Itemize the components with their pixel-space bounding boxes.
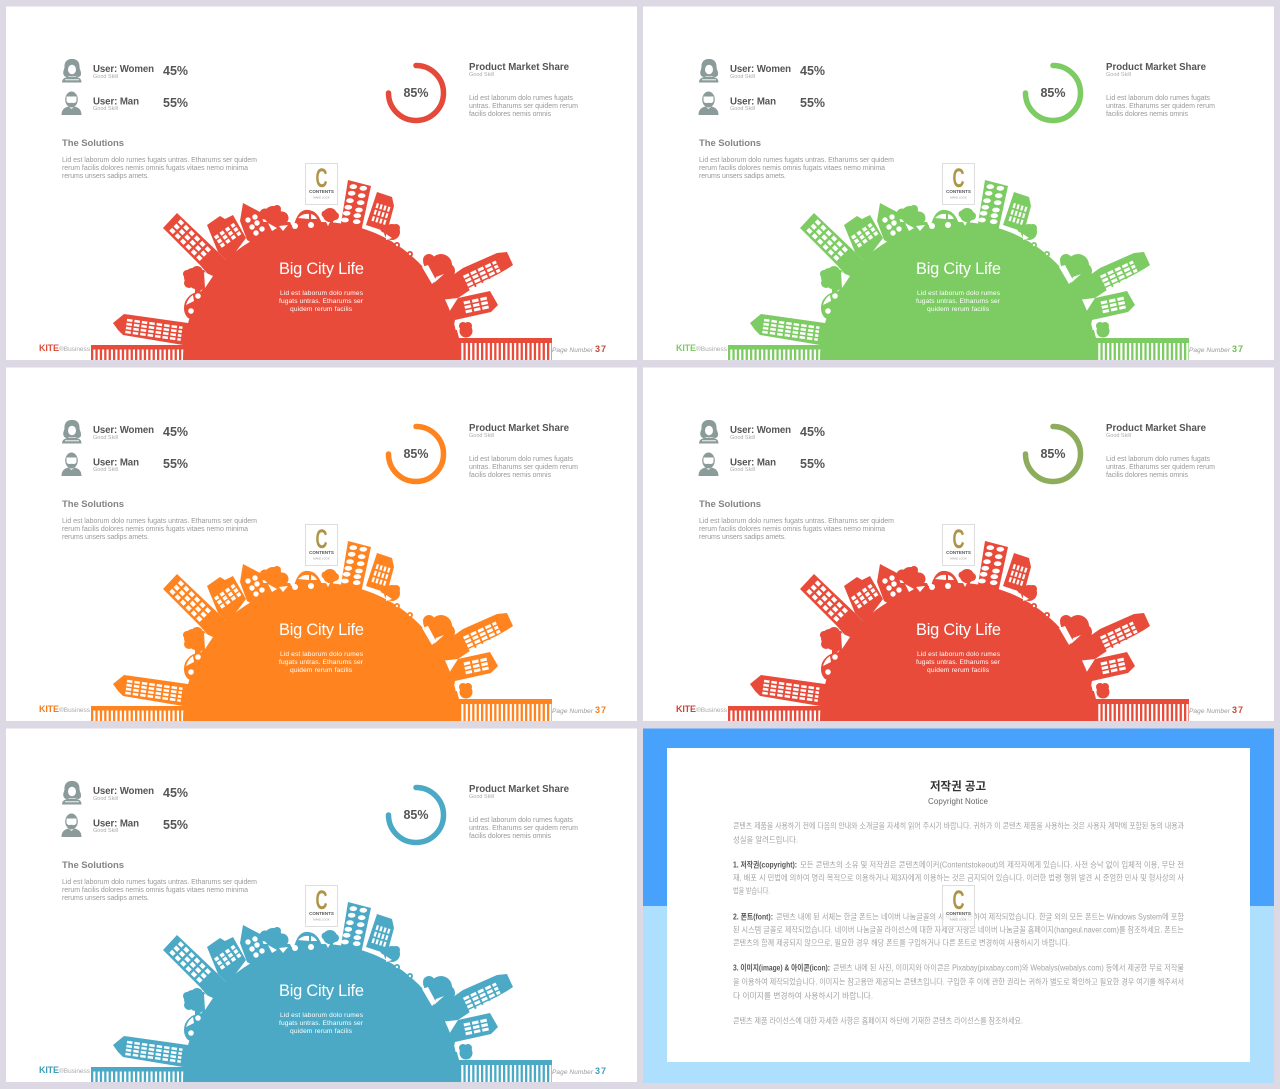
- donut chart 85%: 85%: [1040, 86, 1066, 100]
- the solutions text block: rerum facilis dolores nemis omnis fugats vitaes nemo minima: [62, 526, 248, 533]
- user women label: User: Women: [93, 786, 154, 797]
- the solutions text block: The Solutions: [62, 860, 124, 871]
- logo badge: MAKE LOOK: [950, 918, 967, 922]
- women percentage: 45%: [800, 425, 825, 439]
- logo badge: C: [952, 885, 964, 915]
- logo badge: [942, 163, 974, 204]
- icon: woman user: [62, 59, 82, 82]
- page number: [552, 344, 606, 354]
- women percentage: 45%: [163, 64, 188, 78]
- product market share text block: facilis dolores nemis omnis: [1106, 472, 1188, 479]
- logo badge: CONTENTS: [946, 550, 971, 555]
- page number: Page Number: [1189, 708, 1231, 715]
- donut chart 85%: [388, 66, 444, 120]
- user women label: User: Women: [730, 64, 791, 75]
- page number: Page Number: [552, 1069, 594, 1076]
- big city life heading: fugats untras. Etharums ser: [916, 298, 1001, 305]
- product market share text block: Good Skill: [469, 72, 494, 78]
- the solutions text block: [62, 860, 257, 902]
- user women label: [93, 64, 154, 80]
- product market share text block: [1106, 423, 1215, 479]
- big city life heading: quidem rerum facilis: [290, 667, 353, 674]
- city skyline illustration: [91, 541, 552, 721]
- icon: man user: [698, 452, 718, 476]
- user women label: Good Skill: [730, 435, 755, 441]
- product market share text block: facilis dolores nemis omnis: [469, 111, 552, 118]
- city skyline illustration: [91, 902, 552, 1082]
- page number: Page Number: [1189, 347, 1231, 354]
- man percentage: 55%: [800, 457, 825, 471]
- women percentage: 45%: [800, 64, 825, 78]
- product market share text block: Product Market Share: [1106, 62, 1207, 73]
- logo badge: MAKE LOOK: [950, 196, 967, 200]
- logo badge: C: [952, 524, 964, 554]
- icon: woman user: [699, 420, 718, 444]
- footer brand: ®Business: [696, 345, 728, 353]
- product market share text block: [1106, 62, 1215, 118]
- donut chart 85%: [1026, 426, 1080, 482]
- big city life heading: quidem rerum facilis: [927, 306, 990, 313]
- icon: woman user: [62, 420, 82, 444]
- donut chart 85%: 85%: [1040, 447, 1066, 461]
- logo badge: CONTENTS: [309, 189, 334, 194]
- product market share text block: untras. Etharums ser quidem rerum: [469, 103, 578, 110]
- big city life heading: Lid est laborum dolo rumes: [917, 290, 1001, 297]
- big city life heading: Lid est laborum dolo rumes: [917, 651, 1001, 658]
- user women label: User: Women: [730, 425, 791, 436]
- the solutions text block: [62, 138, 257, 180]
- logo badge: [942, 885, 974, 926]
- section 2 font: 2. 폰트(font):: [733, 912, 773, 922]
- logo badge: [306, 885, 338, 926]
- big city life heading: fugats untras. Etharums ser: [279, 298, 364, 305]
- product market share text block: untras. Etharums ser quidem rerum: [469, 464, 578, 471]
- section 1 copyright: 모든 콘텐츠의 소유 및 저작권은 콘텐츠메이커(Contentstokeout)의 제작자에게 있습니다. 사전 승낙 없이 입체적 이용, 무단 전: [800, 860, 1184, 870]
- footer brand: ®Business: [59, 706, 91, 714]
- section 1 copyright: 1. 저작권(copyright):: [733, 860, 797, 870]
- user women label: [93, 425, 154, 441]
- donut chart 85%: 85%: [403, 808, 429, 822]
- section 3 image and icon: 3. 이미지(image) & 아이콘(icon):: [733, 962, 830, 972]
- the solutions text block: The Solutions: [699, 138, 761, 149]
- big city life heading: Big City Life: [279, 621, 364, 639]
- page number: 37: [595, 1066, 606, 1076]
- panel: red slide: [6, 6, 637, 360]
- footer brand: KITE: [39, 343, 59, 353]
- user women label: Good Skill: [93, 796, 118, 802]
- product market share text block: Good Skill: [469, 794, 494, 800]
- product market share text block: Lid est laborum dolo rumes fugats: [469, 817, 574, 824]
- big city life heading: quidem rerum facilis: [290, 306, 353, 313]
- icon: man user: [62, 452, 82, 476]
- user man label: User: Man: [93, 458, 139, 468]
- big city life heading: Big City Life: [279, 260, 364, 278]
- user women label: [93, 786, 154, 802]
- big city life heading: [916, 621, 1001, 674]
- donut chart 85%: [388, 426, 444, 482]
- product market share text block: untras. Etharums ser quidem rerum: [469, 825, 578, 832]
- the solutions text block: Lid est laborum dolo rumes fugats untras. Etharums ser quidem: [62, 879, 257, 886]
- product market share text block: [469, 784, 578, 840]
- the solutions text block: Lid est laborum dolo rumes fugats untras. Etharums ser quidem: [699, 518, 894, 525]
- the solutions text block: [699, 499, 894, 541]
- user women label: User: Women: [93, 64, 154, 75]
- section 1 copyright: [733, 860, 1185, 896]
- big city life heading: Big City Life: [916, 260, 1001, 278]
- big city life heading: [916, 260, 1001, 313]
- footer brand: ®Business: [696, 706, 728, 714]
- footer brand: [676, 343, 728, 353]
- panel: red and olive slide: [643, 368, 1274, 721]
- the solutions text block: The Solutions: [62, 138, 124, 149]
- footer brand: [39, 704, 91, 714]
- donut chart 85%: 85%: [403, 86, 429, 100]
- footer brand: KITE: [676, 343, 696, 353]
- logo badge: [306, 163, 338, 204]
- big city life heading: [279, 621, 364, 674]
- women percentage: 45%: [163, 425, 188, 439]
- copyright title: [928, 779, 989, 806]
- icon: woman user: [62, 781, 82, 804]
- user man label: Good Skill: [730, 467, 755, 473]
- product market share text block: Lid est laborum dolo rumes fugats: [1106, 95, 1210, 102]
- page number: [1189, 344, 1243, 354]
- product market share text block: Good Skill: [469, 433, 494, 439]
- user man label: User: Man: [730, 96, 776, 108]
- footer brand: [39, 1065, 91, 1075]
- the solutions text block: rerums unsers sadips amets.: [62, 173, 149, 180]
- closing line: 콘텐츠 제품 라이선스에 대한 자세한 사항은 홈페이지 하단에 기재한 콘텐츠 라이선스를 참조하세요.: [733, 1016, 1023, 1026]
- panel: green slide: [643, 6, 1274, 360]
- section 3 image and icon: [733, 962, 1184, 1000]
- man percentage: 55%: [163, 96, 188, 110]
- product market share text block: [469, 62, 578, 118]
- logo badge: MAKE LOOK: [313, 918, 330, 922]
- icon: man user: [62, 92, 82, 115]
- page number: 37: [1232, 344, 1243, 354]
- footer brand: KITE: [676, 704, 696, 714]
- intro paragraph: 콘텐츠 제품을 사용하기 전에 다음의 안내와 소개글을 자세히 읽어 주시기 바랍니다. 귀하가 이 콘텐츠 제품을 사용하는 것은 사용자 계약에 포함된 동의 내용과: [733, 820, 1185, 830]
- the solutions text block: [62, 499, 257, 541]
- donut chart 85%: [388, 788, 444, 842]
- logo badge: C: [316, 885, 328, 915]
- big city life heading: [279, 260, 364, 313]
- big city life heading: fugats untras. Etharums ser: [916, 659, 1001, 666]
- logo badge: CONTENTS: [309, 911, 334, 916]
- page number: 37: [1232, 705, 1243, 715]
- panel: teal slide: [6, 728, 637, 1082]
- icon: man user: [698, 92, 718, 115]
- city skyline illustration: [91, 180, 552, 360]
- section 3 image and icon: 을 이용하여 제작되었습니다. 이미지는 참고용만 제공되는 콘텐츠입니다. 구입한 후 이에 관한 권리는 귀하가 별도로 확인하고 필요한 경우 여기를 해주셔서: [733, 976, 1184, 986]
- donut chart 85%: 85%: [403, 447, 429, 461]
- the solutions text block: The Solutions: [699, 499, 761, 510]
- big city life heading: Big City Life: [916, 621, 1001, 639]
- copyright title: Copyright Notice: [928, 797, 989, 806]
- footer brand: ®Business: [59, 345, 91, 353]
- big city life heading: Lid est laborum dolo rumes: [280, 1012, 364, 1019]
- intro paragraph: 성실을 알려드립니다.: [733, 834, 798, 844]
- intro paragraph: [733, 820, 1185, 844]
- section 1 copyright: 법을 받습니다.: [733, 886, 770, 896]
- product market share text block: facilis dolores nemis omnis: [469, 472, 552, 479]
- section 3 image and icon: 다 이미지를 변경하여 사용하시기 바랍니다.: [733, 990, 873, 1000]
- section 3 image and icon: 콘텐츠 내에 된 사진, 이미지와 아이콘은 Pixabay(pixabay.com)와 Webalys(webalys.com) 등에서 제공한 무료 저작물: [833, 962, 1184, 972]
- panel: copyright notice: [643, 728, 1274, 1083]
- the solutions text block: rerum facilis dolores nemis omnis fugats vitaes nemo minima: [699, 526, 885, 533]
- user man label: Good Skill: [93, 106, 118, 112]
- logo badge: MAKE LOOK: [313, 196, 330, 200]
- user women label: Good Skill: [730, 74, 755, 80]
- product market share text block: Product Market Share: [469, 784, 570, 795]
- the solutions text block: rerums unsers sadips amets.: [699, 534, 786, 541]
- logo badge: CONTENTS: [946, 189, 971, 194]
- user man label: User: Man: [93, 818, 139, 830]
- women percentage: 45%: [163, 786, 188, 800]
- product market share text block: [469, 423, 578, 479]
- icon: man user: [62, 814, 82, 837]
- footer brand: [676, 704, 728, 714]
- logo badge: [942, 524, 974, 566]
- user women label: Good Skill: [93, 435, 118, 441]
- user man label: Good Skill: [93, 828, 118, 834]
- product market share text block: untras. Etharums ser quidem rerum: [1106, 103, 1215, 110]
- user women label: Good Skill: [93, 74, 118, 80]
- copyright title: 저작권 공고: [930, 779, 986, 793]
- product market share text block: Product Market Share: [469, 62, 570, 73]
- user women label: User: Women: [93, 425, 154, 436]
- page number: [1189, 705, 1243, 715]
- the solutions text block: [699, 138, 894, 180]
- page number: [552, 1066, 606, 1076]
- the solutions text block: rerums unsers sadips amets.: [62, 534, 149, 541]
- logo badge: C: [952, 163, 964, 193]
- the solutions text block: Lid est laborum dolo rumes fugats untras. Etharums ser quidem: [62, 518, 257, 525]
- big city life heading: Lid est laborum dolo rumes: [280, 651, 364, 658]
- logo badge: CONTENTS: [946, 911, 971, 916]
- product market share text block: facilis dolores nemis omnis: [469, 833, 552, 840]
- man percentage: 55%: [163, 818, 188, 832]
- page number: Page Number: [552, 347, 594, 354]
- logo badge: MAKE LOOK: [950, 556, 967, 560]
- product market share text block: Lid est laborum dolo rumes fugats: [469, 95, 574, 102]
- footer brand: KITE: [39, 704, 59, 714]
- big city life heading: quidem rerum facilis: [927, 667, 990, 674]
- logo badge: C: [316, 524, 328, 554]
- product market share text block: untras. Etharums ser quidem rerum: [1106, 464, 1215, 471]
- user man label: User: Man: [93, 96, 139, 108]
- section 2 font: 된 시스템 글꼴로 제작되었습니다. 네이버 나눔글꼴 라이선스에 대한 자세한 사항은 네이버 나눔글꼴 홈페이지(hangeul.naver.com)를 참조하세요. 폰트는: [733, 924, 1184, 934]
- icon: woman user: [699, 59, 718, 82]
- product market share text block: Lid est laborum dolo rumes fugats: [469, 456, 574, 463]
- logo badge: MAKE LOOK: [313, 556, 330, 560]
- the solutions text block: rerum facilis dolores nemis omnis fugats vitaes nemo minima: [62, 165, 248, 172]
- product market share text block: Product Market Share: [469, 423, 570, 434]
- footer brand: KITE: [39, 1065, 59, 1075]
- user man label: Good Skill: [730, 106, 755, 112]
- the solutions text block: rerum facilis dolores nemis omnis fugats vitaes nemo minima: [699, 165, 885, 172]
- product market share text block: Good Skill: [1106, 72, 1131, 78]
- footer brand: [39, 343, 91, 353]
- page number: [552, 705, 606, 715]
- big city life heading: fugats untras. Etharums ser: [279, 1020, 364, 1027]
- page number: 37: [595, 344, 606, 354]
- the solutions text block: rerum facilis dolores nemis omnis fugats vitaes nemo minima: [62, 887, 248, 894]
- city skyline illustration: [728, 180, 1189, 360]
- page number: 37: [595, 705, 606, 715]
- product market share text block: Lid est laborum dolo rumes fugats: [1106, 456, 1210, 463]
- section 2 font: [733, 912, 1185, 948]
- big city life heading: fugats untras. Etharums ser: [279, 659, 364, 666]
- man percentage: 55%: [800, 96, 825, 110]
- user women label: [730, 425, 791, 441]
- the solutions text block: rerums unsers sadips amets.: [62, 895, 149, 902]
- user man label: Good Skill: [93, 467, 118, 473]
- the solutions text block: Lid est laborum dolo rumes fugats untras. Etharums ser quidem: [699, 157, 894, 164]
- user man label: User: Man: [730, 458, 776, 468]
- page number: Page Number: [552, 708, 594, 715]
- section 2 font: 콘텐츠의 함께 제공되지 않으므로, 필요한 경우 해당 폰트를 구입하거나 다른 폰트로 변경하여 사용하시기 바랍니다.: [733, 938, 1070, 948]
- section 2 font: 콘텐츠 내에 된 서체는 한글 폰트는 네이버 나눔글꼴의 서체를 사용하여 제작되었습니다. 한글 외의 모든 폰트는 Windows System에 포함: [776, 912, 1185, 922]
- big city life heading: Lid est laborum dolo rumes: [280, 290, 364, 297]
- product market share text block: Product Market Share: [1106, 423, 1207, 434]
- logo badge: [306, 524, 338, 566]
- product market share text block: facilis dolores nemis omnis: [1106, 111, 1188, 118]
- big city life heading: Big City Life: [279, 982, 364, 1000]
- section 1 copyright: 재, 배포 시 민법에 의하여 영리 목적으로 이용하거나 제3자에게 이용하는 것은 금지되어 있습니다. 이러한 법령 행위 발견 시 준엄한 민사 및 형사상의 사: [733, 872, 1185, 882]
- logo badge: CONTENTS: [309, 550, 334, 555]
- big city life heading: quidem rerum facilis: [290, 1028, 353, 1035]
- man percentage: 55%: [163, 457, 188, 471]
- footer brand: ®Business: [59, 1067, 91, 1075]
- big city life heading: [279, 982, 364, 1035]
- user women label: [730, 64, 791, 80]
- the solutions text block: The Solutions: [62, 499, 124, 510]
- logo badge: C: [316, 163, 328, 193]
- the solutions text block: Lid est laborum dolo rumes fugats untras. Etharums ser quidem: [62, 157, 257, 164]
- city skyline illustration: [728, 541, 1189, 721]
- product market share text block: Good Skill: [1106, 433, 1131, 439]
- donut chart 85%: [1026, 66, 1080, 120]
- panel: orange slide: [6, 368, 637, 721]
- the solutions text block: rerums unsers sadips amets.: [699, 173, 786, 180]
